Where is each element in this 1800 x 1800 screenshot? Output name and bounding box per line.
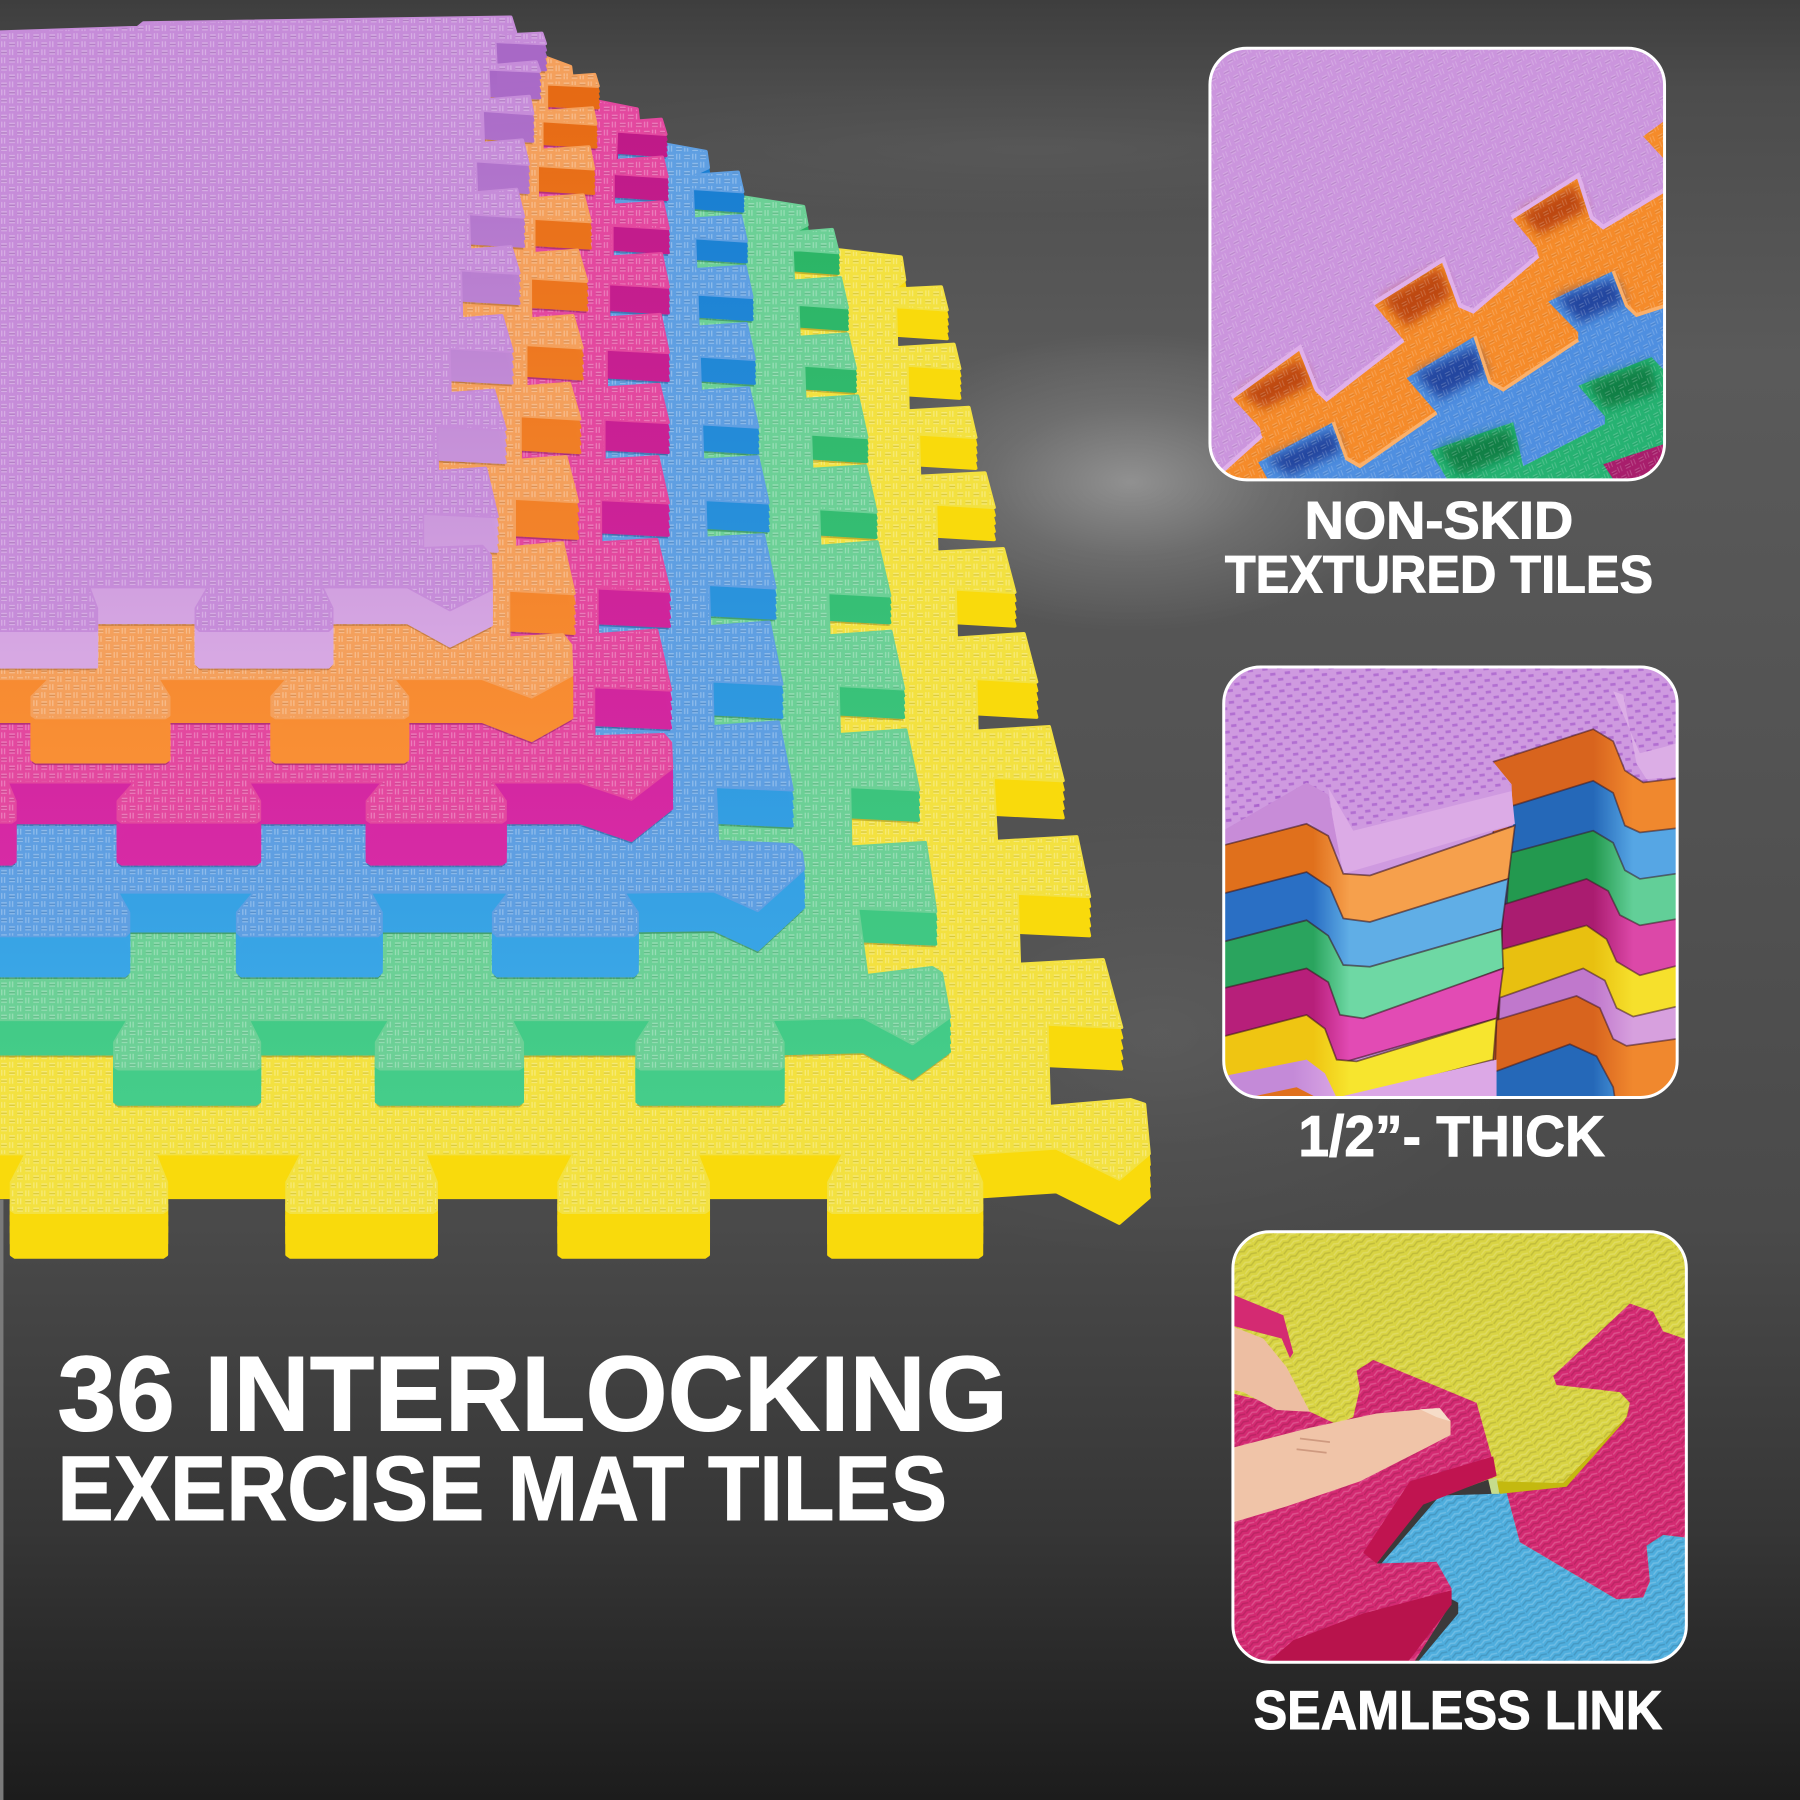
title line 1: 36 INTERLOCKING — [57, 1333, 1008, 1453]
panel: 1/2 inch thick — [1200, 650, 1700, 1169]
orange mat — [0, 46, 598, 765]
photo: stack edge of tiles — [1225, 668, 1676, 1096]
photo: fingers linking tiles — [1234, 1233, 1685, 1661]
title — [57, 1333, 1008, 1540]
card border — [1224, 667, 1677, 1097]
caption — [1225, 491, 1653, 604]
green mat — [0, 138, 949, 1108]
blue mat — [0, 103, 804, 979]
card border — [1233, 1232, 1686, 1662]
caption: 1/2”- THICK — [1298, 1105, 1605, 1169]
title line 2: EXERCISE MAT TILES — [57, 1438, 947, 1540]
panel: seamless link — [1231, 1230, 1688, 1730]
caption: NON-SKID — [1305, 491, 1573, 550]
yellow mat — [0, 172, 1149, 1257]
magenta mat — [0, 69, 672, 867]
card border — [1210, 48, 1665, 480]
caption: TEXTURED TILES — [1225, 545, 1653, 604]
lilac mat — [0, 17, 545, 670]
panel: non-skid textured tiles — [1208, 46, 1666, 594]
caption: SEAMLESS LINK — [1254, 1679, 1662, 1741]
photo: textured tile corners — [1211, 50, 1664, 478]
stacked coloured foam mat tiles — [0, 17, 1149, 1257]
